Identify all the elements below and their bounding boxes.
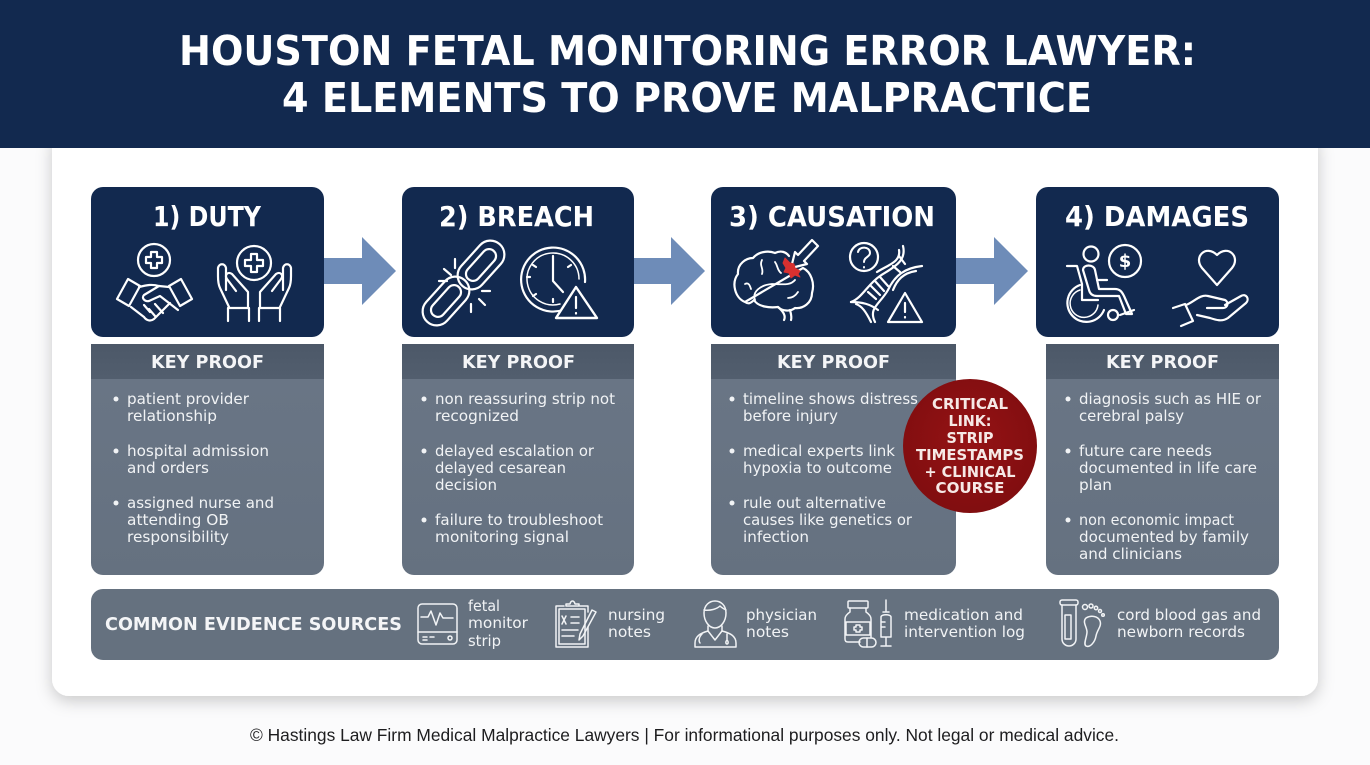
evidence label: cord blood gas: newborn records xyxy=(1117,623,1245,641)
evidence label: fetal monitor strip: fetal xyxy=(468,597,500,615)
icon: physician xyxy=(695,601,736,647)
evidence label: physician notes: physician xyxy=(746,606,817,624)
list: damages proof: documented in life care xyxy=(1079,459,1257,477)
icon: fetal monitor xyxy=(418,604,457,644)
panel: common evidence sources xyxy=(91,589,1279,660)
evidence label: nursing notes: nursing xyxy=(608,606,665,624)
evidence label: fetal monitor strip xyxy=(468,597,529,650)
list: damages proof: and clinicians xyxy=(1079,545,1182,563)
list: causation proof: causes like genetics or xyxy=(743,511,913,529)
evidence label: cord blood gas: cord blood gas and xyxy=(1117,606,1261,624)
icon: broken chain link xyxy=(417,235,510,331)
evidence label: nursing notes: notes xyxy=(608,623,651,641)
list: breach proof: decision xyxy=(435,476,497,494)
panel: 3 causation key proof xyxy=(711,344,956,575)
panel: 4 damages header: 4) DAMAGES xyxy=(1065,200,1249,233)
arrow: causation to damages xyxy=(956,237,1028,305)
panel: 2 breach key proof: KEY PROOF xyxy=(462,353,575,373)
icon: clock with warning xyxy=(521,248,597,318)
list: duty proof: assigned nurse and xyxy=(127,494,274,512)
list: causation proof: medical experts link xyxy=(743,442,895,460)
panel: 2 breach header: 2) BREACH xyxy=(439,200,594,233)
list: causation proof xyxy=(730,390,918,546)
icon: medicine bottle, syringe and pill xyxy=(845,600,891,647)
list: damages proof xyxy=(1066,390,1262,563)
list: breach proof: monitoring signal xyxy=(435,528,569,546)
callout: critical link xyxy=(903,379,1037,513)
list: duty proof xyxy=(114,390,274,546)
callout: critical link: CRITICAL xyxy=(932,395,1008,413)
icon: hands holding medical cross xyxy=(218,246,291,321)
callout: critical link: TIMESTAMPS xyxy=(916,446,1024,464)
list: breach proof: delayed cesarean xyxy=(435,459,566,477)
arrow: duty to breach xyxy=(324,237,396,305)
evidence label: physician notes: notes xyxy=(746,623,789,641)
evidence label: physician notes xyxy=(746,606,817,641)
white content card xyxy=(52,130,1318,696)
list: duty proof: attending OB xyxy=(127,511,229,529)
list: breach proof: failure to troubleshoot xyxy=(435,511,603,529)
panel: 3 causation header xyxy=(711,187,956,337)
icon: brain with injury marker xyxy=(734,240,818,320)
list: duty proof: patient provider xyxy=(127,390,250,408)
title banner: 4 ELEMENTS TO PROVE MALPRACTICE xyxy=(282,74,1092,122)
list: causation proof: timeline shows distress xyxy=(743,390,918,408)
panel: 1 duty key proof xyxy=(91,344,324,575)
evidence label: cord blood gas xyxy=(1117,606,1261,641)
list: damages proof: documented by family xyxy=(1079,528,1249,546)
panel: 2 breach header xyxy=(402,187,634,337)
list: causation proof: before injury xyxy=(743,407,838,425)
list: damages proof: non economic impact xyxy=(1079,511,1234,529)
list: damages proof: diagnosis such as HIE or xyxy=(1079,390,1262,408)
list: breach proof: recognized xyxy=(435,407,519,425)
list: causation proof: hypoxia to outcome xyxy=(743,459,892,477)
evidence label: medication log: medication and xyxy=(904,606,1023,624)
icon: heart in open hand xyxy=(1173,251,1248,326)
icon: wheelchair with dollar: $ xyxy=(1119,251,1131,272)
callout: critical link: COURSE xyxy=(936,479,1004,497)
list: causation proof: infection xyxy=(743,528,809,546)
list: duty proof: hospital admission xyxy=(127,442,269,460)
callout: critical link: STRIP xyxy=(946,429,994,447)
icon: handshake with medical cross xyxy=(117,244,192,320)
panel: common evidence sources: COMMON EVIDENCE SOURCES xyxy=(105,614,402,635)
title banner xyxy=(0,0,1370,148)
evidence label: nursing notes xyxy=(608,606,665,641)
list: duty proof: responsibility xyxy=(127,528,229,546)
icon: dna with question mark and warning xyxy=(850,243,922,322)
list: duty proof: relationship xyxy=(127,407,217,425)
icon: wheelchair with dollar xyxy=(1067,245,1141,322)
panel: 4 damages key proof xyxy=(1046,344,1279,575)
panel: 1 duty key proof: KEY PROOF xyxy=(151,353,264,373)
evidence label: medication log: intervention log xyxy=(904,623,1025,641)
list: breach proof: non reassuring strip not xyxy=(435,390,615,408)
title banner: HOUSTON FETAL MONITORING ERROR LAWYER: xyxy=(179,27,1196,75)
panel: 2 breach key proof xyxy=(402,344,634,575)
callout: critical link: + CLINICAL xyxy=(924,463,1016,481)
icon: clipboard with pencil xyxy=(556,601,596,647)
panel: 1 duty header xyxy=(91,187,324,337)
evidence label: fetal monitor strip: monitor xyxy=(468,614,529,632)
panel: 4 damages header xyxy=(1036,187,1279,337)
panel: 3 causation key proof: KEY PROOF xyxy=(777,353,890,373)
list: damages proof: future care needs xyxy=(1079,442,1212,460)
evidence label: medication log xyxy=(904,606,1025,641)
list: breach proof: delayed escalation or xyxy=(435,442,595,460)
list: duty proof: and orders xyxy=(127,459,209,477)
list: causation proof: rule out alternative xyxy=(743,494,886,512)
panel: 1 duty header: 1) DUTY xyxy=(153,200,262,233)
icon: test tube and newborn footprint xyxy=(1060,600,1104,646)
footer disclaimer: © Hastings Law Firm Medical Malpractice Lawyers | For informational purposes only. Not legal or medical advice. xyxy=(250,725,1119,745)
panel: 3 causation header: 3) CAUSATION xyxy=(729,200,935,233)
list: damages proof: plan xyxy=(1079,476,1112,494)
list: breach proof xyxy=(422,390,615,546)
arrow: breach to causation xyxy=(634,237,705,305)
evidence label: fetal monitor strip: strip xyxy=(468,632,501,650)
panel: 4 damages key proof: KEY PROOF xyxy=(1106,353,1219,373)
list: damages proof: cerebral palsy xyxy=(1079,407,1184,425)
callout: critical link: LINK: xyxy=(948,412,992,430)
